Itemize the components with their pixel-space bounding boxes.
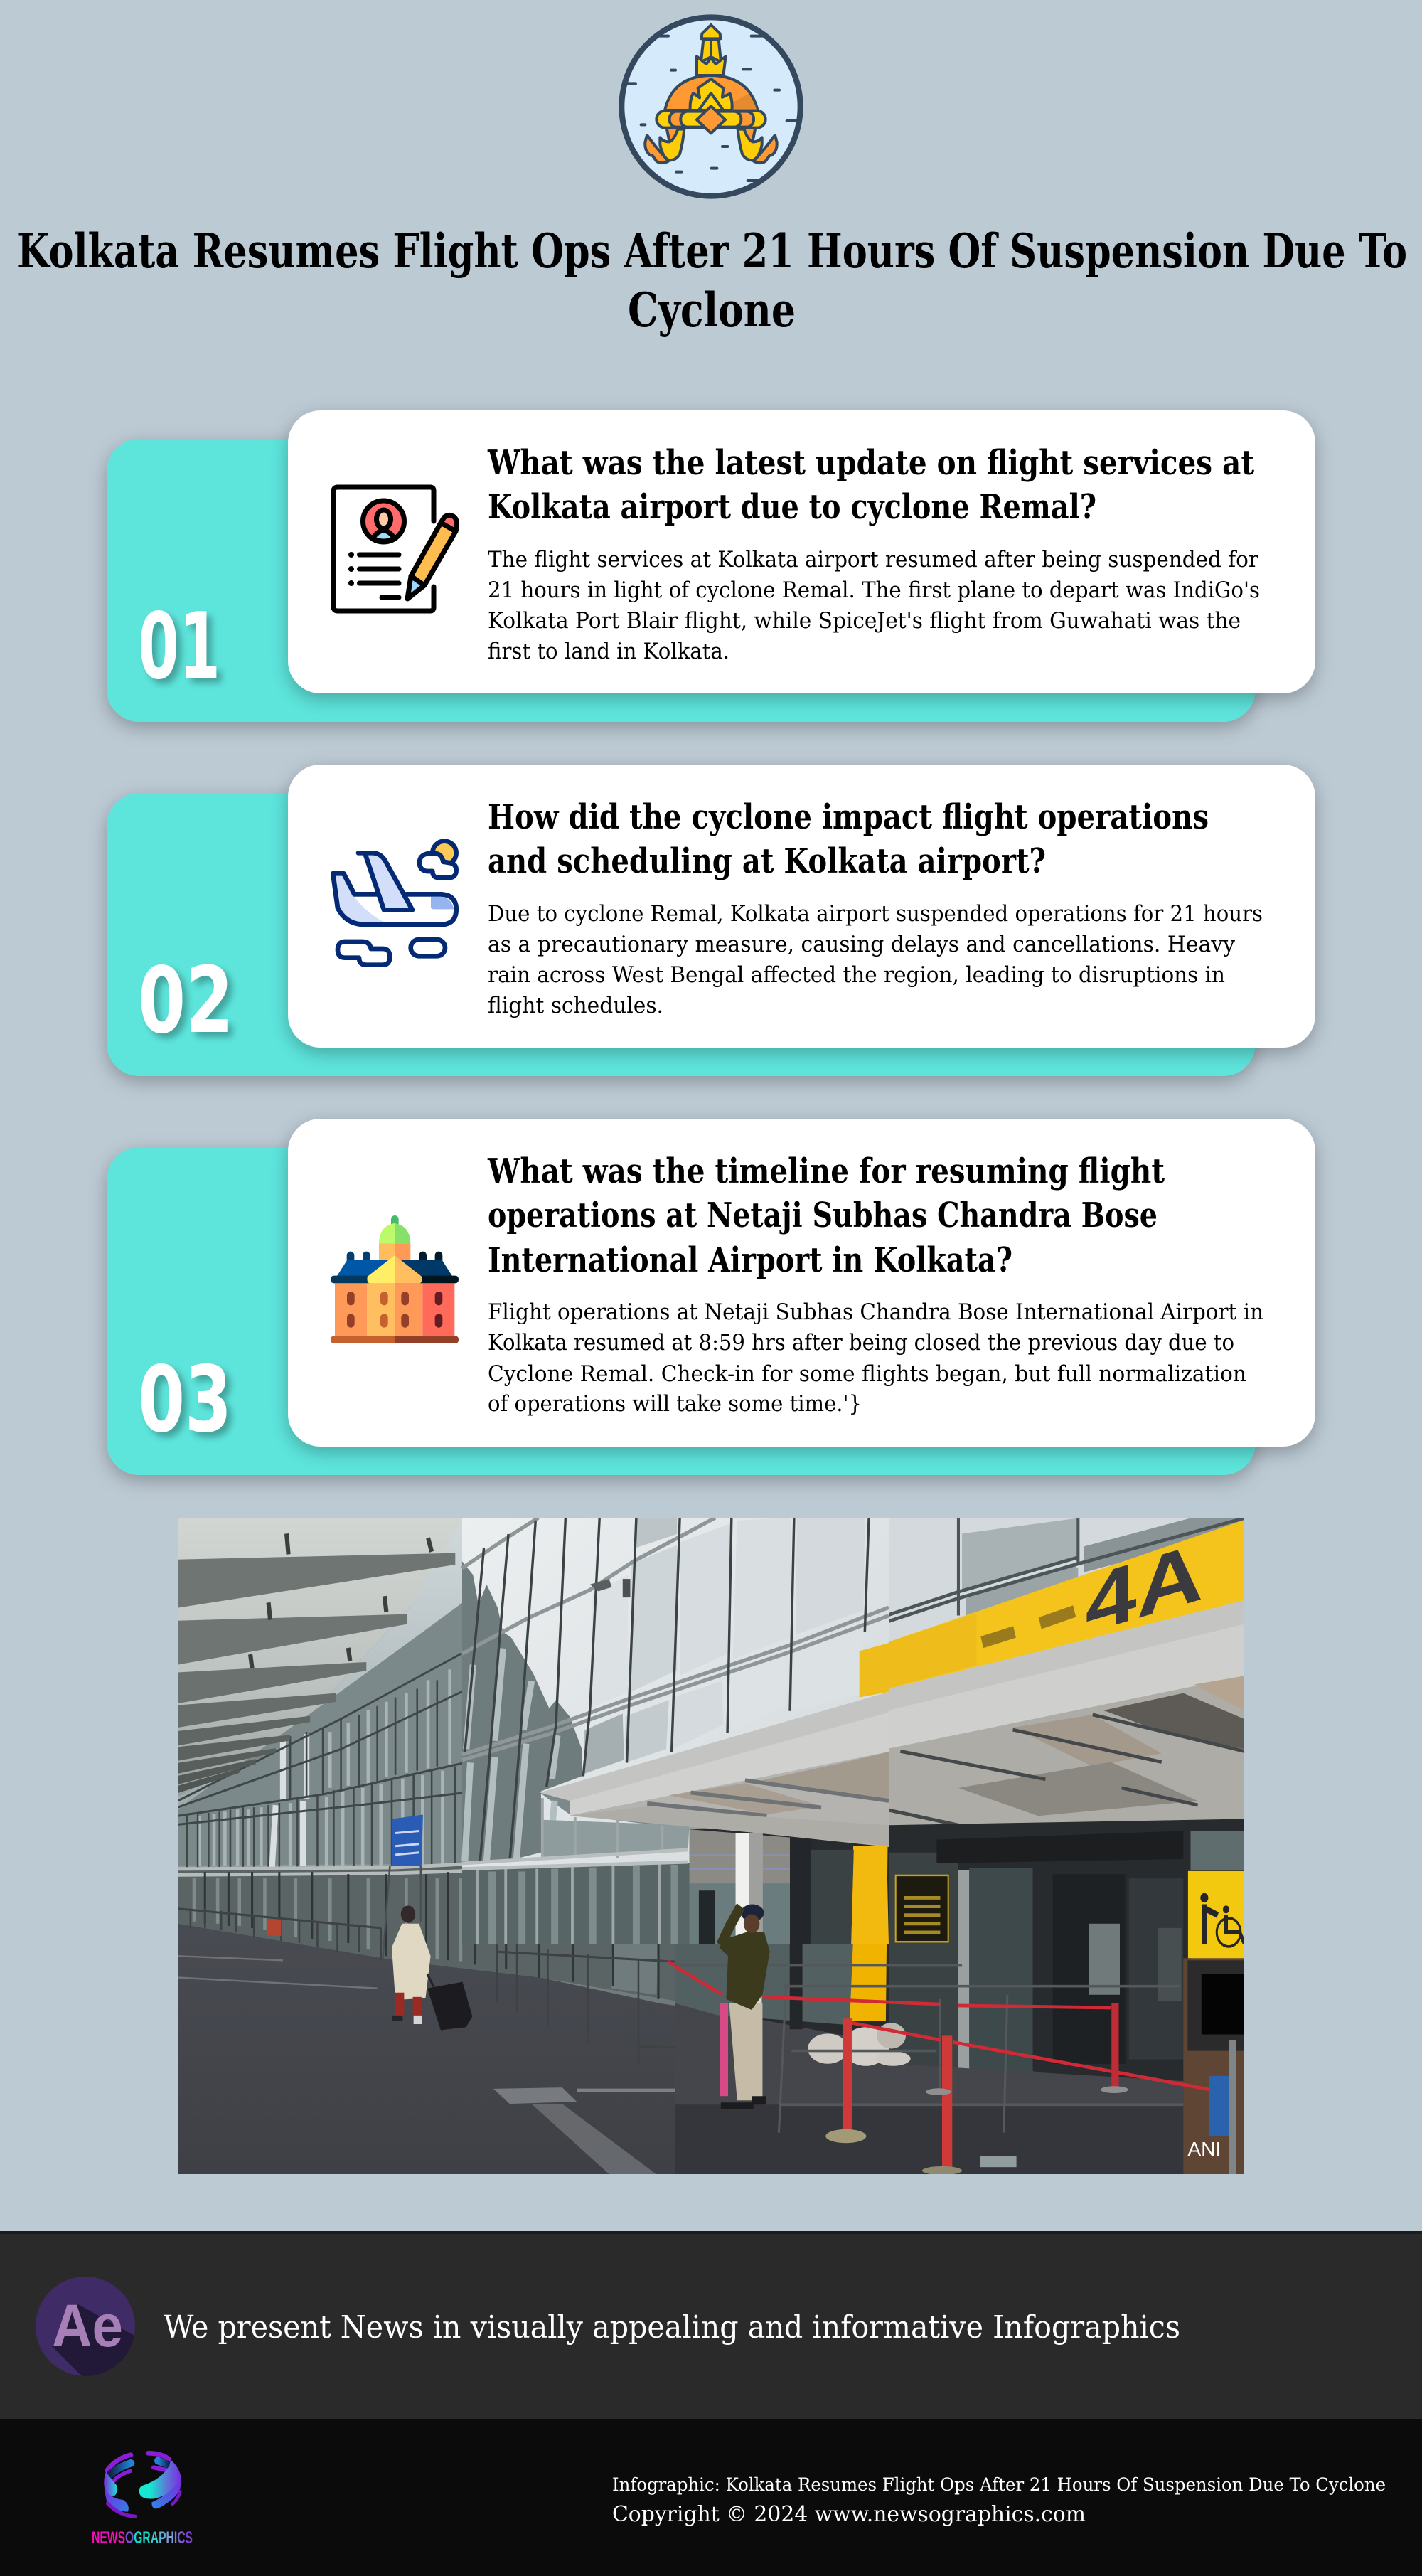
body text 3: of operations will take some time.'} (488, 1391, 862, 1417)
body text 3: Kolkata resumed at 8:59 hrs after being closed the previous day due to (488, 1330, 1234, 1356)
photo: Kolkata airport terminal entrance: ANI (1187, 2139, 1221, 2160)
icon: Newsographics globe logo (104, 2453, 181, 2516)
icon: header crown badge (621, 17, 801, 196)
body text 1: 21 hours in light of cyclone Remal. The first plane to depart was IndiGo's (488, 578, 1260, 603)
body text 2: Due to cyclone Remal, Kolkata airport suspended operations for 21 hours (488, 901, 1263, 927)
body text 2: flight schedules. (488, 993, 663, 1018)
number tab 02 (107, 793, 1256, 1076)
icon: airplane and clouds (333, 841, 456, 965)
panel: question 3 (107, 1119, 1315, 1475)
number 03: 03 (138, 1347, 232, 1453)
footer credit text: Copyright © 2024 www.newsographics.com (612, 2502, 1086, 2527)
icon: resume document and pencil (333, 487, 457, 611)
panel: question 1 (107, 410, 1315, 722)
body text 1: Kolkata Port Blair flight, while SpiceJet's flight from Guwahati was the (488, 608, 1241, 634)
panel: question 2 (107, 765, 1315, 1076)
heading 2: and scheduling at Kolkata airport? (488, 841, 1046, 881)
footer credit text (612, 2474, 1386, 2527)
heading 3: International Airport in Kolkata? (488, 1240, 1012, 1280)
icon: After Effects logo: Ae (52, 2292, 123, 2359)
heading 3: What was the timeline for resuming flight (487, 1151, 1165, 1191)
heading 3 (487, 1151, 1165, 1280)
photo: Kolkata airport terminal entrance: 4A (1086, 1525, 1203, 1651)
tagline text: We present News in visually appealing and informative Infographics (164, 2309, 1180, 2346)
footer credit text: Infographic: Kolkata Resumes Flight Ops After 21 Hours Of Suspension Due To Cyclone (612, 2474, 1386, 2495)
panel: tagline band (0, 2231, 1422, 2419)
body text 3: Flight operations at Netaji Subhas Chandra Bose International Airport in (488, 1299, 1263, 1325)
heading 1 (487, 443, 1254, 527)
title (17, 223, 1407, 338)
white card 1 (288, 410, 1315, 693)
body text 2 (488, 901, 1263, 1018)
body text 2: as a precautionary measure, causing delays and cancellations. Heavy (488, 932, 1235, 957)
body text 1 (488, 547, 1260, 664)
white card 2 (288, 765, 1315, 1048)
heading 1: What was the latest update on flight services at (487, 443, 1254, 483)
heading 1: Kolkata airport due to cyclone Remal? (488, 487, 1096, 527)
body text 3 (488, 1299, 1263, 1417)
panel: footer (0, 2419, 1422, 2576)
number 01: 01 (138, 594, 220, 700)
title: Cyclone (628, 282, 796, 338)
logo wordmark: NEWSOGRAPHICS (92, 2528, 193, 2548)
heading 2: How did the cyclone impact flight operations (488, 797, 1209, 837)
body text 3: Cyclone Remal. Check-in for some flights began, but full normalization (488, 1361, 1246, 1387)
heading 2 (488, 797, 1209, 881)
number 02: 02 (138, 948, 233, 1054)
photo: Kolkata airport terminal entrance (178, 1518, 1244, 2180)
icon: airport terminal building (331, 1215, 459, 1343)
number tab 01 (107, 439, 1256, 722)
heading 3: operations at Netaji Subhas Chandra Bose (488, 1196, 1158, 1235)
white card 3 (288, 1119, 1315, 1447)
number tab 03 (107, 1147, 1256, 1475)
icon: After Effects logo (36, 2277, 142, 2376)
body text 1: The flight services at Kolkata airport resumed after being suspended for (488, 547, 1258, 573)
body text 2: rain across West Bengal affected the region, leading to disruptions in (488, 962, 1225, 988)
body text 1: first to land in Kolkata. (488, 639, 729, 664)
